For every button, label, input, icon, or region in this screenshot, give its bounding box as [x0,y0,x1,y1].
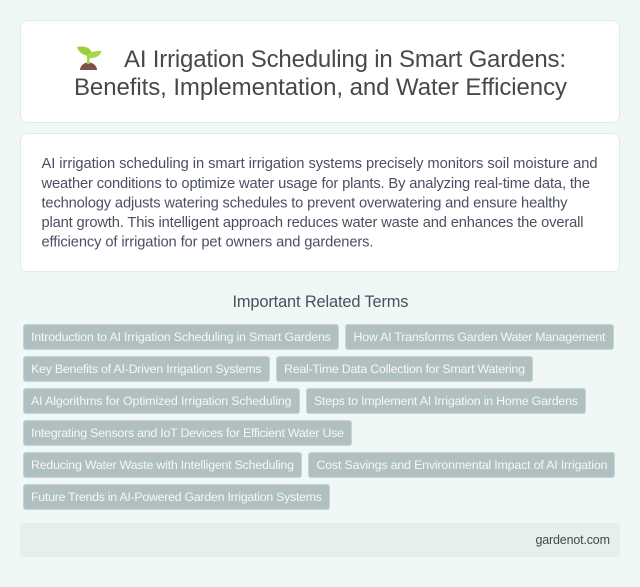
panel: summary card [20,134,620,272]
tag [24,324,338,350]
tag [24,388,300,414]
tag: Integrating Sensors and IoT Devices for Efficient Water Use [31,426,344,440]
tag [24,484,330,510]
tag: Key Benefits of AI-Driven Irrigation Systems [31,362,262,376]
tag [346,324,614,350]
text block: summary: technology adjusts watering schedules to prevent overwatering and ensure healthy [42,196,568,212]
text block: summary: plant growth. This intelligent approach reduces water waste and enhances the overall [42,215,584,231]
tag: How AI Transforms Garden Water Management [354,330,606,344]
footer: gardenot.com [536,533,610,547]
panel: title card [20,20,620,122]
title: AI Irrigation Scheduling in Smart Gardens: [124,46,566,73]
footer [20,523,620,557]
icon: seedling [77,46,102,70]
text block: summary: weather conditions to optimize water usage for plants. By analyzing real-time data, the [40,176,590,192]
tag [308,452,614,478]
text block: summary: efficiency of irrigation for pet owners and gardeners. [42,234,374,250]
text block: summary [40,156,598,250]
tag: Introduction to AI Irrigation Scheduling in Smart Gardens [31,330,331,344]
heading: related terms: Important Related Terms [232,293,408,311]
tag [306,388,586,414]
tag [276,356,532,382]
tag: Steps to Implement AI Irrigation in Home Gardens [314,394,578,408]
tag [24,356,270,382]
tag [24,452,302,478]
title: Benefits, Implementation, and Water Efficiency [74,74,567,101]
title [74,46,567,101]
tag [24,420,352,446]
tag: Cost Savings and Environmental Impact of AI Irrigation [316,458,608,472]
panel: related term tags [24,324,614,510]
tag: Real-Time Data Collection for Smart Watering [284,362,525,376]
text block: summary: AI irrigation scheduling in smart irrigation systems precisely monitors soil moisture and [42,156,598,172]
tag: Reducing Water Waste with Intelligent Scheduling [31,458,294,472]
tag: AI Algorithms for Optimized Irrigation Scheduling [31,394,292,408]
tag: Future Trends in AI-Powered Garden Irrigation Systems [31,490,322,504]
